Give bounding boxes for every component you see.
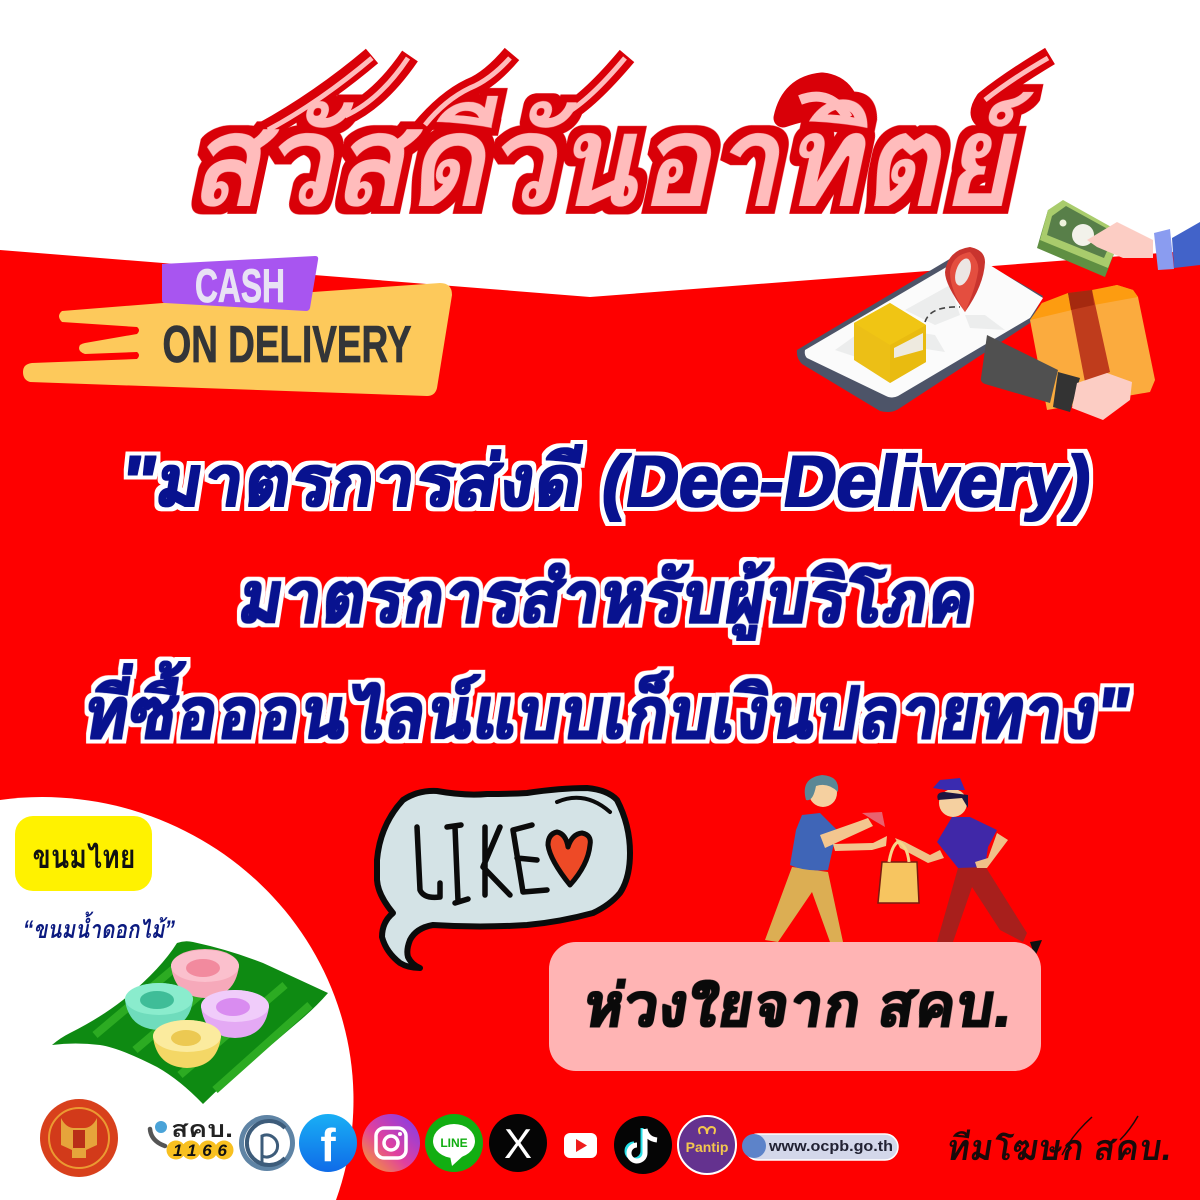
- location pin: [945, 247, 985, 312]
- dashed route: [925, 307, 960, 322]
- hand holding parcel: [1072, 373, 1132, 420]
- delivery man: [937, 866, 1027, 942]
- icon: facebook: f: [320, 1119, 336, 1171]
- icon: x: [489, 1114, 547, 1172]
- illustration: customer and delivery man: [765, 775, 1042, 957]
- dark sleeve: [981, 335, 1058, 403]
- label: cash: [162, 256, 318, 311]
- hotline 1166: สคบ.: [171, 1116, 233, 1142]
- icon: pantip: [678, 1116, 736, 1174]
- badge: cash on delivery: CASH: [195, 259, 285, 312]
- badge: cash on delivery: [23, 256, 452, 396]
- money: [1037, 210, 1122, 277]
- illustration: flower water dessert on banana leaf: [52, 941, 328, 1104]
- badge: thai dessert: [15, 816, 152, 891]
- icon: youtube: [564, 1133, 597, 1158]
- phone: [797, 253, 1043, 412]
- icon: ocpb: [239, 1115, 295, 1171]
- icon: facebook: [299, 1114, 357, 1172]
- caption box: [549, 942, 1041, 1071]
- speech bubble: like: [377, 788, 630, 968]
- dessert: teal: [125, 983, 193, 1030]
- title: สวัสดีวันอาทิตย์: [181, 88, 1037, 234]
- caption box: ห่วงใยจาก สคบ.: [579, 971, 1018, 1039]
- blue cuff: [1172, 222, 1200, 268]
- orange parcel: [1030, 285, 1155, 410]
- dessert: yellow: [153, 1020, 221, 1068]
- icon: x: X: [504, 1120, 532, 1167]
- label: on delivery: ON DELIVERY: [162, 316, 412, 374]
- illustration: phone, parcels and hands: [797, 200, 1200, 420]
- headline: มาตรการสำหรับผู้บริโภค: [233, 557, 981, 640]
- red background: [0, 250, 1200, 1200]
- icon: tiktok: [614, 1116, 672, 1174]
- heart: [548, 832, 590, 885]
- dessert: pink: [171, 949, 239, 998]
- icon: pantip: Pantip: [686, 1139, 728, 1155]
- white circle panel: [0, 797, 353, 1200]
- dessert name: “ขนมน้ำดอกไม้”: [23, 911, 175, 944]
- like lettering: [417, 825, 547, 903]
- icon: line: LINE: [440, 1136, 468, 1150]
- headline: "มาตรการส่งดี (Dee-Delivery): [115, 441, 1098, 522]
- headline: ที่ซื้อออนไลน์แบบเก็บเงินปลายทาง": [78, 661, 1138, 754]
- customer: [765, 867, 843, 942]
- badge: thai dessert: ขนมไทย: [32, 838, 136, 875]
- website pill: [742, 1134, 898, 1160]
- hotline 1166: 1166: [173, 1141, 228, 1160]
- shoe: [1030, 940, 1042, 957]
- icon: line: [425, 1114, 483, 1172]
- signature: ทีมโฆษก สคบ.: [944, 1127, 1175, 1168]
- dessert: purple: [201, 990, 269, 1038]
- logo: ocpb seal: [40, 1099, 118, 1177]
- yellow box: [854, 303, 926, 383]
- paper bag: [878, 862, 919, 903]
- hand with money: [1087, 222, 1153, 258]
- red ticket: [862, 812, 885, 827]
- website pill: www.ocpb.go.th: [768, 1138, 893, 1155]
- hotline 1166: [150, 1116, 234, 1160]
- icon: instagram: [362, 1114, 420, 1172]
- headline: [78, 441, 1138, 754]
